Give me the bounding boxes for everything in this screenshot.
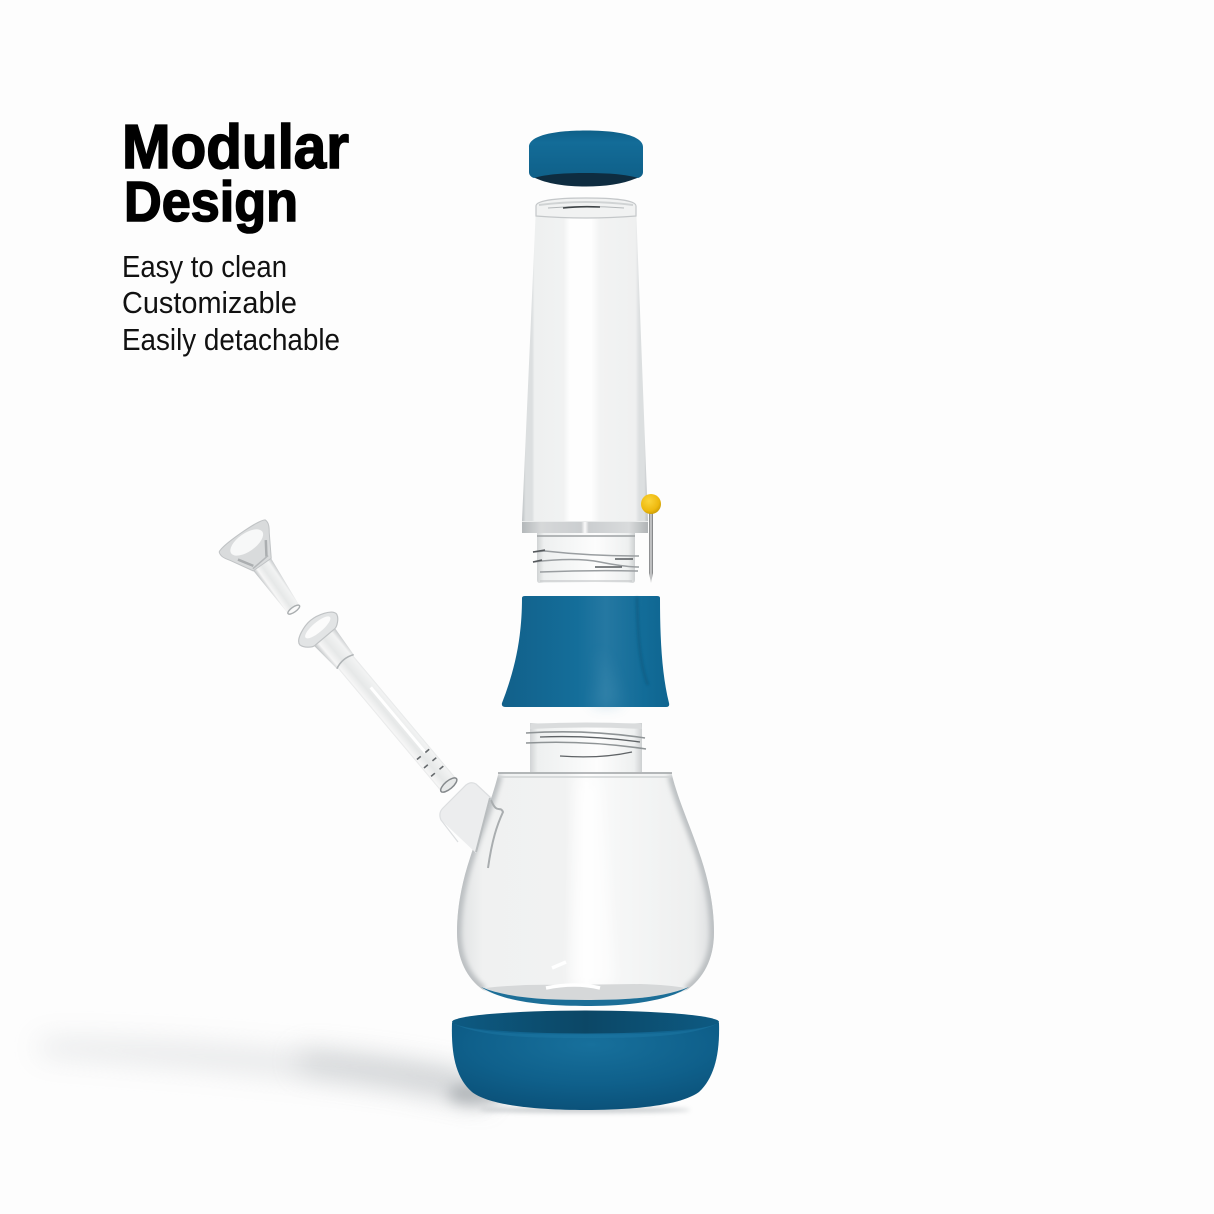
upper glass tube [522, 198, 648, 533]
blue collar [502, 596, 669, 707]
feature list [122, 249, 340, 357]
infographic canvas [50, 122, 720, 1116]
feature list: Customizable [122, 285, 297, 320]
feature list: Easily detachable [122, 322, 340, 357]
lower threaded neck [526, 722, 646, 773]
title: Design [124, 170, 298, 234]
upper threaded neck [533, 533, 639, 583]
side joint [440, 783, 491, 853]
yellow pin [641, 494, 661, 583]
floor shadow [40, 1040, 690, 1113]
glass bowl piece [217, 517, 319, 628]
title [122, 113, 349, 234]
feature list: Easy to clean [122, 249, 287, 284]
glass base body [457, 772, 714, 1006]
title: Modular [122, 113, 349, 182]
downstem [292, 605, 470, 804]
blue base bowl [452, 1010, 719, 1110]
blue top cap [529, 130, 643, 186]
